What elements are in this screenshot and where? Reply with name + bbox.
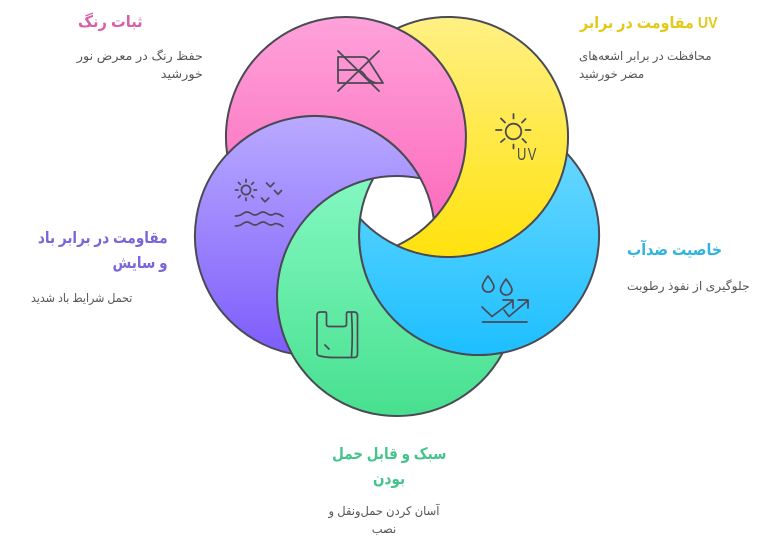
heading: UV resistance: UV مقاومت در برابر: [580, 15, 718, 32]
body: UV resistance: محافظت در برابر اشعه‌های: [579, 49, 712, 63]
icon: no-sun drying: [338, 51, 383, 91]
body: wind and abrasion resistance: تحمل شرایط باد شدید: [31, 291, 132, 305]
heading: light and portable: بودن: [373, 471, 405, 488]
heading: wind and abrasion resistance: مقاومت در برابر باد: [38, 230, 168, 247]
body: light and portable: نصب: [372, 522, 396, 536]
heading: wind and abrasion resistance: و سایش: [113, 255, 168, 272]
text block: light and portable: [328, 446, 446, 536]
crescent: blue: [359, 153, 599, 355]
icon: sun with UV: UV: [517, 145, 538, 165]
heading: wind and abrasion resistance: [38, 230, 168, 272]
text block: wind and abrasion resistance: [31, 230, 168, 305]
text block: waterproof: [627, 240, 750, 293]
icon: plastic bag: [317, 312, 358, 358]
icon: sun with UV: [496, 114, 538, 165]
body: waterproof: جلوگیری از نفوذ رطوبت: [627, 279, 750, 293]
body: light and portable: [328, 504, 440, 536]
heading: waterproof: خاصیت ضدآب: [627, 242, 722, 259]
icon: water drops and arrows: [482, 276, 528, 322]
body: color fastness: حفظ رنگ در معرض نور: [77, 49, 203, 63]
crescent: yellow: [397, 17, 568, 257]
text block: UV resistance: [579, 15, 718, 81]
body: color fastness: [76, 49, 203, 81]
heading: color fastness: ثبات رنگ: [78, 14, 143, 31]
text block: color fastness: [76, 12, 203, 81]
body: light and portable: آسان کردن حمل‌ونقل و: [329, 504, 439, 518]
body: UV resistance: مضر خورشید: [579, 67, 644, 81]
crescent: purple: [195, 116, 420, 354]
body: color fastness: خورشید: [161, 67, 203, 81]
body: UV resistance: [579, 49, 712, 81]
icon: sun, birds and waves: [236, 180, 283, 226]
heading: light and portable: [332, 446, 446, 488]
crescent: green: [277, 178, 503, 416]
heading: light and portable: سبک و قابل حمل: [332, 446, 446, 463]
crescent: pink: [226, 17, 466, 219]
